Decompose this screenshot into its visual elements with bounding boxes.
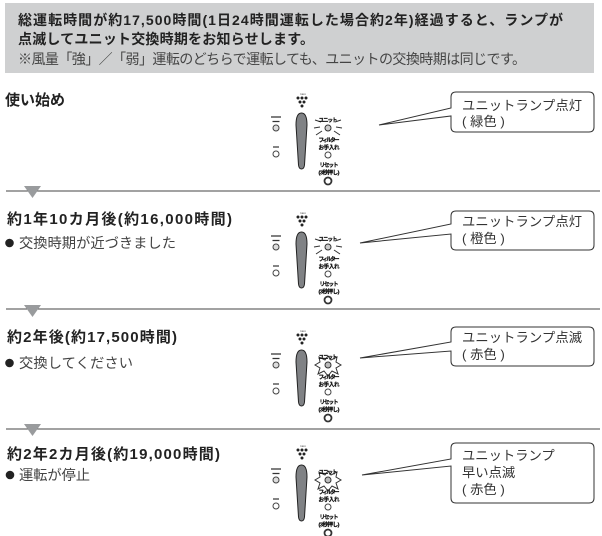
stage 1 panel icon: リセット (320, 162, 338, 169)
stage 3 panel icon: リセット (320, 399, 338, 406)
stage 3 callout (360, 327, 594, 366)
stage 2 panel icon: (3秒押し) (318, 288, 340, 296)
stage 4 panel icon: (3秒押し) (318, 520, 340, 528)
stage 4 text: 運転が停止 (19, 467, 90, 484)
stage 2 text: 交換時期が近づきました (19, 235, 176, 252)
stage 1 panel icon: 1ion (300, 92, 306, 96)
stage 2 callout (360, 211, 594, 250)
stage 1 panel icon: お手入れ (318, 144, 340, 152)
header panel (5, 3, 594, 73)
stage 4 panel icon (271, 444, 341, 536)
divider 2 (6, 305, 600, 317)
stage 3 panel icon: フィルター (318, 373, 340, 381)
stage 3 text: 交換してください (19, 355, 133, 372)
stage 1 panel icon: (3秒押し) (318, 168, 340, 176)
stage 4 callout (362, 443, 594, 503)
stage 1 panel icon: ユニット (318, 117, 338, 124)
stage 4 panel icon: ユニット (318, 469, 338, 476)
stage 1 panel icon (271, 92, 342, 184)
stage 3 panel icon: ユニット (318, 354, 338, 361)
stage 2 panel icon: フィルター (318, 255, 340, 263)
header text: 総運転時間が約17,500時間(1日24時間運転した場合約2年)経過すると、ランプが (18, 12, 563, 28)
stage 1 callout: ユニットランプ点灯 (462, 98, 582, 113)
stage 4 panel icon: リセット (320, 514, 338, 521)
divider 3 (6, 424, 600, 436)
stage 4 panel icon: お手入れ (318, 496, 340, 504)
stage 2 panel icon: ユニット (318, 236, 338, 243)
stage 1 callout: ( 緑色 ) (462, 114, 505, 129)
stage 1 panel icon: フィルター (318, 136, 340, 144)
stage 1 callout (379, 92, 594, 132)
header text (18, 12, 563, 67)
stage 3 panel icon: 1ion (300, 329, 306, 333)
header text: 点滅してユニット交換時期をお知らせします。 (18, 31, 314, 47)
stage 2 heading: 約1年10カ月後(約16,000時間) (7, 210, 232, 228)
stage 4 panel icon: 1ion (300, 444, 306, 448)
stage 3 heading: 約2年後(約17,500時間) (7, 328, 177, 346)
divider 1 (6, 186, 600, 198)
stage 4 callout: ( 赤色 ) (462, 482, 505, 497)
stage 2 panel icon (271, 211, 342, 304)
stage 2 callout: ユニットランプ点灯 (462, 214, 582, 229)
stage 4 callout: ユニットランプ (462, 448, 555, 463)
stage 3 panel icon (271, 329, 341, 422)
stage 4 callout: 早い点滅 (462, 465, 515, 480)
stage 3 panel icon: お手入れ (318, 380, 340, 388)
stage 1 heading: 使い始め (5, 91, 65, 109)
stage 2 panel icon: リセット (320, 281, 338, 288)
stage 2 callout: ( 橙色 ) (462, 231, 505, 246)
stage 2 panel icon: 1ion (300, 211, 306, 215)
stage 2 panel icon: お手入れ (318, 262, 340, 270)
stage 3 panel icon: (3秒押し) (318, 406, 340, 414)
header text: ※風量「強」／「弱」運転のどちらで運転しても、ユニットの交換時期は同じです。 (18, 51, 526, 67)
stage 3 callout: ( 赤色 ) (462, 347, 505, 362)
stage 4 panel icon: フィルター (318, 488, 340, 496)
stage 3 callout: ユニットランプ点滅 (462, 330, 582, 345)
stage 4 heading: 約2年2カ月後(約19,000時間) (7, 445, 220, 463)
